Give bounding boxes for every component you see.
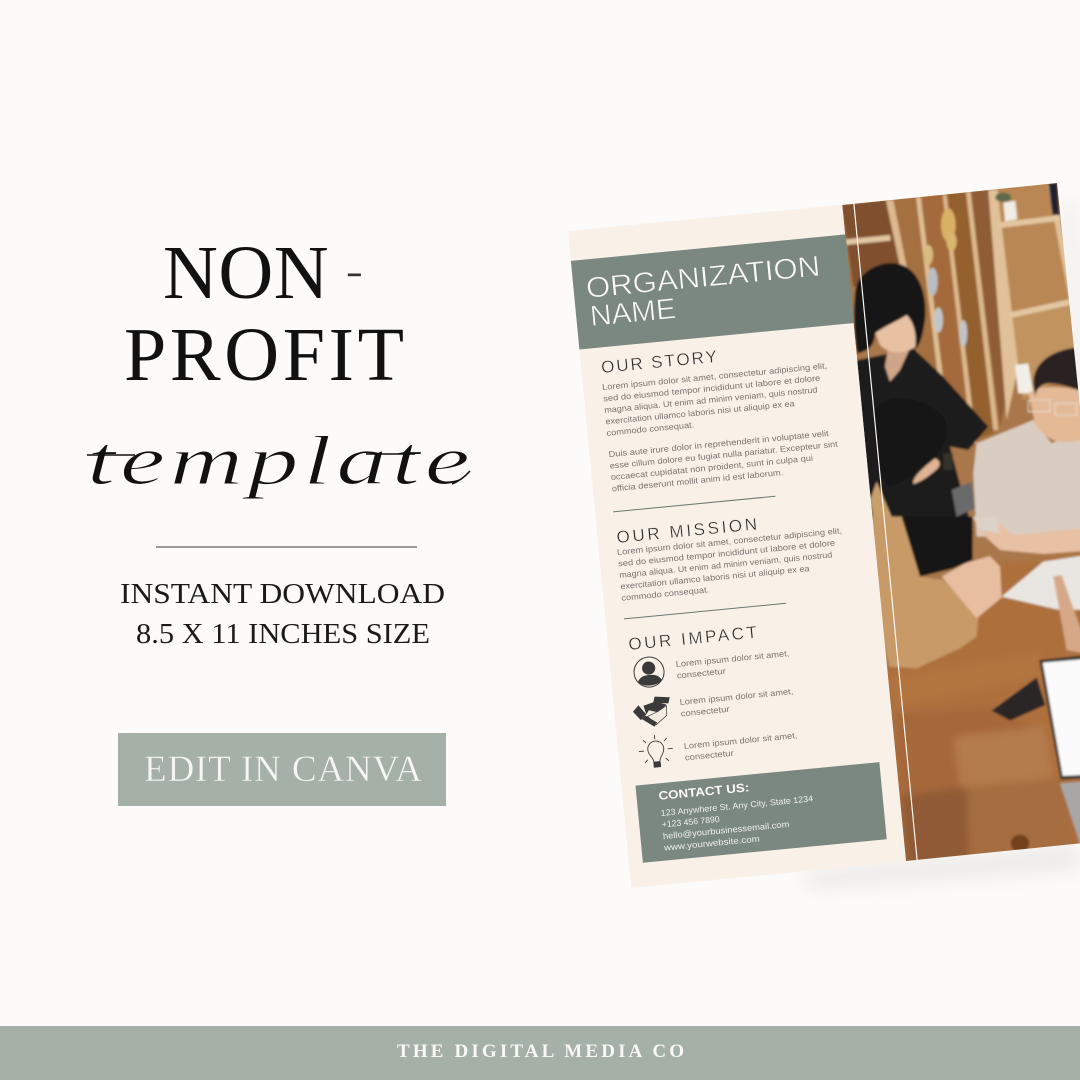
section: our story xyxy=(599,336,841,493)
section: our impact: consectetur xyxy=(680,704,730,718)
photo: people xyxy=(850,263,1080,537)
section: our story: Duis aute irure dolor in reprehenderit in voluptate velit xyxy=(608,428,830,459)
details: download and size: INSTANT DOWNLOAD xyxy=(120,578,445,610)
section: our mission: Lorem ipsum dolor sit amet, consectetur adipiscing elit, xyxy=(617,525,842,557)
section: our story: exercitation ullamco laboris nisi ut aliquip ex ea xyxy=(605,398,795,426)
title: non-profit: NON xyxy=(163,231,329,315)
photo: bookshelf xyxy=(842,183,1080,447)
section: our story: magna aliqua. Ut enim ad minim veniam, quis nostrud xyxy=(604,384,818,415)
cream panel xyxy=(568,205,905,888)
contact box xyxy=(635,762,887,863)
contact box: CONTACT US: xyxy=(658,780,750,803)
section: our impact: consectetur xyxy=(684,748,734,762)
flyer page xyxy=(568,200,918,889)
section: our impact: Lorem ipsum dolor sit amet, xyxy=(675,648,790,669)
section: our mission: commodo consequat. xyxy=(621,584,709,603)
white vertical rule xyxy=(853,200,918,861)
section: our mission: sed do eiusmod tempor incididunt ut labore et dolore xyxy=(618,538,836,568)
section: our impact: consectetur xyxy=(676,666,726,680)
contact box: 123 Anywhere St. Any City, State 1234 xyxy=(660,793,814,818)
photo: table and foreground xyxy=(887,554,1080,861)
section: our story: esse cillum dolore eu fugiat nulla pariatur. Excepteur sint xyxy=(609,439,839,471)
header banner: organization name xyxy=(571,234,854,349)
section: our mission xyxy=(615,507,847,603)
contact box: www.yourwebsite.com xyxy=(662,833,760,853)
document shadow xyxy=(800,846,1080,888)
section: our mission: magna aliqua. Ut enim ad minim veniam, quis nostrud xyxy=(619,549,833,580)
section: our story: occaecat cupidatat non proident, sunt in culpa qui xyxy=(610,453,813,482)
section: our story: OUR STORY xyxy=(600,347,718,377)
footer band: brand name: THE DIGITAL MEDIA CO xyxy=(397,1041,684,1062)
details: download and size: 8.5 X 11 INCHES SIZE xyxy=(136,618,430,650)
section: our impact: Lorem ipsum dolor sit amet, xyxy=(679,686,794,707)
section: our story: officia deserunt mollit anim id est laborum. xyxy=(611,467,784,493)
title: non-profit xyxy=(124,231,404,397)
title: non-profit: PROFIT xyxy=(124,313,404,397)
section: our mission: OUR MISSION xyxy=(616,515,758,547)
flyer photo xyxy=(830,170,1080,880)
icon: handshake xyxy=(632,695,672,729)
section: our story: commodo consequat. xyxy=(606,419,695,438)
button: edit in canva xyxy=(118,733,446,806)
header banner: organization name: NAME xyxy=(589,293,677,333)
contact box: hello@yourbusinessemail.com xyxy=(662,819,790,841)
section: our story: Lorem ipsum dolor sit amet, consectetur adipiscing elit, xyxy=(602,360,828,392)
details: download and size xyxy=(120,578,445,650)
section: our impact: OUR IMPACT xyxy=(628,623,758,654)
icon: person xyxy=(633,656,665,688)
footer band: brand name xyxy=(0,1026,1080,1080)
contact box: +123 456 7890 xyxy=(661,814,720,829)
section: our mission: exercitation ullamco laboris nisi ut aliquip ex ea xyxy=(620,563,810,591)
section: our story: sed do eiusmod tempor incididunt ut labore et dolore xyxy=(603,373,821,403)
script word: template: template xyxy=(87,421,470,499)
icon: light bulb xyxy=(637,733,674,769)
title: non-profit: - xyxy=(345,239,364,301)
button: edit in canva: EDIT IN CANVA xyxy=(144,749,422,790)
section: our impact: Lorem ipsum dolor sit amet, xyxy=(683,730,798,751)
header banner: organization name: ORGANIZATION xyxy=(585,251,822,305)
section: our impact xyxy=(626,620,799,769)
